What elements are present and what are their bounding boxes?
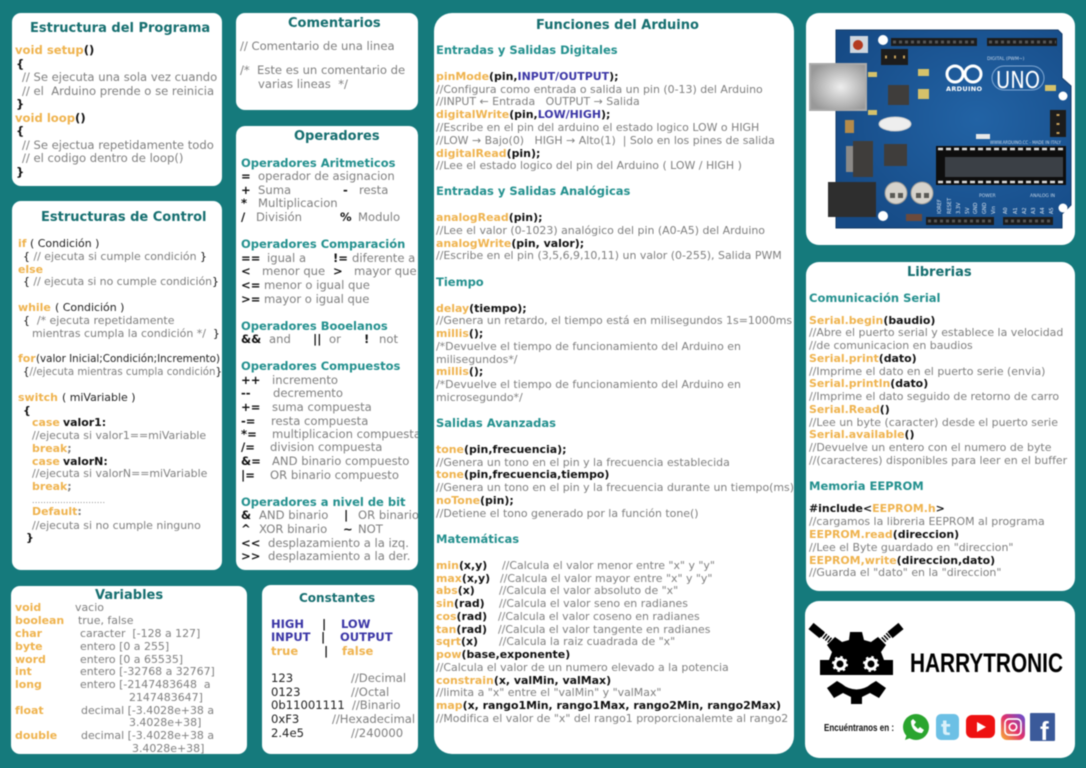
section: Matematicas: //Calcula el valor absoluto de "x" [499,584,678,597]
icon: facebook: f [1040,716,1049,746]
icon: Arduino UNO board: UNO [996,68,1040,94]
section: Tiempo: /*Devuelve el tiempo de funcionamiento del Arduino en [436,378,741,391]
section: Matematicas: min(x,y) [436,559,487,572]
variable type table: word [15,653,46,666]
code: if else: { // ejecuta si cumple condición } [23,250,207,263]
operators: compuestos [241,359,421,483]
section: Entradas y Salidas Analogicas: analogWrite(pin, valor); [436,237,584,250]
operators: nivel de bit: XOR binario [259,522,327,536]
operators: compuestos: -= [241,414,256,428]
operators: aritmeticos: operador de asignacion [258,169,395,183]
section: Matematicas [436,532,788,725]
bottom pin labels [937,197,1055,214]
operators: nivel de bit: & [241,508,251,522]
bottom pin labels: A0 [1003,207,1009,214]
operators: aritmeticos: % [340,210,352,224]
section: Comunicacion Serial: //Imprime el dato seguido de retorno de carro [809,390,1059,403]
section: Entradas y Salidas Analogicas: //Escribe en el pin (3,5,6,9,10,11) un valor (0-255), Salida PWM [436,249,782,262]
operators: comparacion: == [241,251,260,265]
code: setup and loop: // el codigo dentro de loop() [22,151,183,165]
operators: comparacion: >= [241,292,260,306]
code: switch: break; [32,480,72,493]
operators: nivel de bit: NOT [358,522,384,536]
operators: nivel de bit: >> [241,549,260,563]
heading: Funciones del Arduino: Funciones del Arduino [536,18,699,33]
operators: aritmeticos: resta [359,183,388,197]
code: switch: valorN: [63,455,108,468]
code: switch: } [26,531,34,544]
code: switch: case [32,416,60,429]
section: Comunicacion Serial: Comunicación Serial [809,291,940,305]
code: for: for [18,352,36,365]
code: switch: ( miVariable ) [62,391,135,404]
operators: comparacion [241,237,417,306]
operators: comparacion: menor o igual que [264,278,370,292]
logical constants: HIGH [271,617,304,631]
section: Salidas Avanzadas: tone(pin,frecuencia,tiempo) [436,468,609,481]
panel: Arduino UNO board image [806,13,1075,245]
code: switch: Default: [32,505,82,518]
variable type table: decimal [-3.4028e+38 a [81,704,214,717]
logical constants: INPUT [271,630,311,644]
section: Matematicas: //Calcula el valor coseno en radianes [498,610,700,623]
social label: Encuéntranos en : [824,723,894,734]
code: if else [18,237,219,288]
code: switch: .......................... [32,496,105,505]
section: Salidas Avanzadas [436,416,794,520]
number formats: 123 [271,671,293,685]
section: Matematicas: //Modifica el valor de "x" del rango1 proporcionalemte al rango2 [436,712,788,725]
section: Entradas y Salidas Analogicas: analogRead(pin); [436,211,542,224]
variable type table: double [15,729,57,742]
code: if else: if [18,237,27,250]
microcontroller chip [936,146,1066,185]
comment examples: Este es un comentario de [257,63,405,77]
section: Tiempo: /*Devuelve el tiempo de funcionamiento del Arduino en [436,340,741,353]
number formats: //Decimal [351,671,406,685]
logical constants: true [271,644,298,658]
bottom pin labels: IOREF [937,199,943,214]
section: Comunicacion Serial: Serial.print(dato) [809,352,917,365]
operators: aritmeticos: * [241,196,247,210]
operators: aritmeticos [241,156,400,224]
panel: Harrytronic brand [805,601,1075,758]
code: switch: valor1: [63,416,106,429]
number formats: 2.4e5 [271,726,304,740]
number formats: //Binario [352,698,401,712]
comment examples: // Comentario de una linea [240,39,395,53]
icon: Arduino UNO board: DIGITAL (PWM~) [987,56,1025,62]
icon: Arduino UNO board [810,30,1071,228]
section: Matematicas: //Calcula el valor menor entre "x" y "y" [502,559,715,572]
variable type table: void [15,601,41,614]
operators: compuestos: multiplicacion compuesta [272,427,421,441]
code: for [18,352,222,378]
variable type table: int [15,665,32,678]
section: Comunicacion Serial: Serial.begin(baudio) [809,314,935,327]
section: Memoria EEPROM: #include<EEPROM.h> [809,502,945,515]
variable type table: boolean [15,614,64,627]
operators: aritmeticos: Operadores Aritmeticos [241,156,396,170]
heading: Librerias: Librerias [907,265,972,280]
operators: aritmeticos: Multiplicacion [258,196,338,210]
code: setup and loop: // Se ejecuta una sola vez cuando [22,70,217,84]
operators: aritmeticos: División [256,210,302,224]
code: setup and loop: void setup() [15,43,94,57]
section: Matematicas: cos(rad) [436,610,487,623]
icon: Harrytronic gear robot logo [811,626,901,704]
operators: booleanos: and [269,332,291,346]
code: setup and loop: // Se ejectua repetidamente todo [22,138,214,152]
code: setup and loop: void loop() [15,111,86,125]
operators: comparacion: diferente a [352,251,415,265]
icon: whatsapp [903,714,929,740]
bottom pin labels: A3 [1031,207,1037,214]
operators: aritmeticos: + [241,183,251,197]
section: Comunicacion Serial: Serial.available() [809,428,914,441]
reset button [850,36,868,53]
code: setup and loop: } [16,165,24,179]
section: Memoria EEPROM: EEPROM,write(direccion,dato) [809,554,995,567]
variable type table: entero [-2147483648 a [80,678,211,691]
section: Matematicas: max(x,y) [436,572,490,585]
operators: booleanos: ! [364,332,369,346]
operators: aritmeticos: Modulo [358,210,400,224]
panel: Estructuras de Control [12,201,222,570]
code: setup and loop: } [16,97,24,111]
section: Matematicas: map(x, rango1Min, rango1Max, rango2Min, rango2Max) [436,699,781,712]
section: Matematicas: pow(base,exponente) [436,648,570,661]
section: Memoria EEPROM: //Lee el Byte guardado en "direccion" [809,541,1013,554]
section: Matematicas: //Calcula el valor seno en radianes [499,597,688,610]
operators: compuestos: decremento [273,386,343,400]
capacitors [885,182,933,204]
section: Memoria EEPROM [809,479,1045,579]
section: Comunicacion Serial: //Imprime el dato en el puerto serie (envia) [809,365,1045,378]
code: while: ( Condición ) [55,301,124,314]
comment examples: /* [240,63,250,77]
heading: Estructura del Programa: Estructura del Programa [30,21,210,36]
icon: twitter [936,714,959,740]
logical constants: false [342,644,374,658]
section: Matematicas: //Calcula el valor de un numero elevado a la potencia [436,661,729,674]
heading: Comentarios: Comentarios [288,16,381,31]
section: Comunicacion Serial: //de comunicacion en baudios [809,339,973,352]
section: Entradas y Salidas Analogicas [436,184,782,262]
panel: Comentarios [236,13,418,110]
operators: nivel de bit: OR binario [358,508,419,522]
variable type table: 2147483647] [129,691,203,704]
variable type table: true, false [78,614,134,627]
bottom pin labels: A2 [1022,207,1028,214]
section: Comunicacion Serial: //Abre el puerto serial y establece la velocidad [809,326,1063,339]
section: Entradas y Salidas Analogicas: Entradas y Salidas Analógicas [436,184,631,198]
variable type table: vacio [75,601,104,614]
code: while: while [18,301,51,314]
code: for: {//ejecuta mientras cumpla condición} [23,365,222,378]
logical constants: | [321,630,325,644]
code: while [18,301,220,340]
code: setup and loop: // el Arduino prende o se reinicia [22,84,214,98]
section: Comunicacion Serial: Serial.println(dato) [809,377,928,390]
code: switch: //ejecuta si valorN==miVariable [32,467,208,480]
number formats: 0xF3 [271,712,299,726]
code: switch: case [32,455,60,468]
operators: nivel de bit: ~ [343,522,353,536]
section: Tiempo: millis(); [436,327,483,340]
section: Entradas y Salidas Digitales: //Lee el estado logico del pin del Arduino ( LOW / HIGH ) [436,159,742,172]
section: Comunicacion Serial: //Lee un byte (caracter) desde el puerto serie [809,416,1058,429]
section: Entradas y Salidas Digitales: //Configura como entrada o salida un pin (0-13) del Arduino [436,83,763,96]
number formats: 0b11001111 [271,698,345,712]
section: Entradas y Salidas Digitales: //INPUT ← Entrada OUTPUT → Salida [436,95,640,108]
section: Memoria EEPROM: //Guarda el "dato" en la "direccion" [809,566,1001,579]
operators: comparacion: > [333,264,343,278]
code: setup and loop [15,43,217,179]
operators: compuestos: resta compuesta [271,414,368,428]
USB connector [810,64,866,110]
section: Salidas Avanzadas: //Detiene el tono generado por la función tone() [436,507,699,520]
code: while: mientras cumpla la condición */ } [32,327,220,340]
operators: comparacion: mayor o igual que [264,292,369,306]
section: Matematicas: //Calcula la raiz cuadrada de "x" [499,635,675,648]
section: Tiempo: milisegundos*/ [436,353,518,366]
bottom pin labels: 3.3V [956,202,962,214]
icon: instagram [1001,714,1025,740]
operators: booleanos: Operadores Booelanos [241,319,388,333]
comment examples: varias lineas */ [258,77,348,91]
operators: nivel de bit: | [344,508,348,523]
icon: Arduino UNO board: POWER [979,193,996,199]
bottom pin labels: A4 [1040,207,1046,214]
code: switch: { [23,404,31,417]
operators: compuestos: &= [241,454,261,468]
operators: comparacion: mayor que [354,264,417,278]
section: Comunicacion Serial: //Devuelve un entero con el numero de byte [809,441,1052,454]
operators: booleanos: || [313,332,321,347]
bottom pin labels: 5V [965,207,971,214]
section: Comunicacion Serial: //(caracteres) disponibles para leer en el buffer [809,454,1068,467]
operators: compuestos: AND binario compuesto [272,454,409,468]
number formats: //Hexadecimal [332,712,415,726]
section: Matematicas: Matemáticas [436,532,519,546]
operators: nivel de bit: desplazamiento a la izq. [268,536,409,550]
board logo [947,66,981,82]
panel: Variables [11,586,247,755]
panel: Funciones del Arduino [434,13,794,754]
variable type table [15,601,215,755]
operators: compuestos: ++ [241,373,260,387]
code: if else: { // ejecuta si no cumple condición} [23,275,219,288]
bottom pin labels: RESET [947,197,953,214]
section: Matematicas: //limita a "x" entre el "valMin" y "valMax" [436,686,661,699]
operators: nivel de bit: Operadores a nivel de bit [241,495,406,509]
code: switch: //ejecuta si no cumple ninguno [32,519,201,532]
operators: comparacion: < [241,264,251,278]
section: Salidas Avanzadas: Salidas Avanzadas [436,416,556,430]
code: setup and loop: { [16,57,24,71]
operators: compuestos: suma compuesta [272,400,372,414]
section: Salidas Avanzadas: tone(pin,frecuencia); [436,443,567,456]
code: switch [18,391,208,544]
operators: booleanos: or [329,332,341,346]
operators: compuestos: /= [241,440,255,454]
operators: nivel de bit: desplazamiento a la der. [268,549,410,563]
variable type table: byte [15,640,43,653]
number formats [271,671,415,740]
comment examples [240,39,405,91]
number formats: //240000 [351,726,403,740]
code: while: { /* ejecuta repetidamente [23,314,175,327]
section: Salidas Avanzadas: //Genera un tono en el pin y la frecuencia establecida [436,456,730,469]
operators: compuestos: Operadores Compuestos [241,359,400,373]
section: Matematicas: abs(x) [436,584,475,597]
operators: booleanos: && [241,332,261,346]
section: Entradas y Salidas Digitales: digitalRead(pin); [436,147,540,160]
section: Matematicas: sin(rad) [436,597,485,610]
bottom pin labels: GND [973,202,979,214]
section: Entradas y Salidas Digitales [436,43,775,172]
heading: Operadores: Operadores [294,129,380,144]
section: Tiempo: millis(); [436,365,483,378]
icon: Arduino UNO board: ANALOG IN [1030,193,1055,199]
operators: compuestos: += [241,400,260,414]
variable type table: decimal [-3.4028e+38 a [81,729,214,742]
section: Memoria EEPROM: Memoria EEPROM [809,479,924,493]
section: Tiempo: //Genera un retardo, el tiempo está en milisegundos 1s=1000ms [436,314,792,327]
operators: compuestos: OR binario compuesto [270,468,399,482]
operators: aritmeticos: / [241,210,246,224]
bottom pin labels: A1 [1013,207,1019,214]
section: Matematicas: tan(rad) [436,623,487,636]
section: Comunicacion Serial [809,291,1068,467]
operators: aritmeticos: = [241,169,251,183]
heading: Variables: Variables [95,588,163,603]
operators: comparacion: <= [241,278,260,292]
section: Entradas y Salidas Digitales: digitalWrite(pin,LOW/HIGH); [436,108,610,121]
section: Entradas y Salidas Digitales: //LOW → Bajo(0) HIGH → Alto(1) | Solo en los pines de salida [436,134,775,147]
variable type table: 3.4028e+38] [132,742,204,755]
code: for: (valor Inicial;Condición;Incremento) [36,352,220,365]
code: switch: break; [32,442,72,455]
section: Memoria EEPROM: //cargamos la libreria EEPROM al programa [809,515,1045,528]
panel: Librerias [806,262,1075,591]
variable type table: entero [0 a 65535] [80,653,183,666]
operators: comparacion: Operadores Comparación [241,237,405,251]
logical constants: | [322,617,326,631]
variable type table: 3.4028e+38] [129,716,201,729]
bottom pin labels: A5 [1049,207,1055,214]
operators: booleanos: not [379,332,398,346]
operators: aritmeticos: - [343,183,348,197]
code: if else: else [18,263,43,276]
operators: compuestos: division compuesta [270,440,382,454]
section: Salidas Avanzadas: noTone(pin); [436,494,514,507]
code: if else: ( Condición ) [30,237,99,250]
heading: Estructuras de Control: Estructuras de Control [41,210,207,225]
operators: compuestos: -- [241,386,251,400]
operators: compuestos: incremento [272,373,338,387]
panel: Estructura del Programa [12,13,222,186]
section: Tiempo [436,275,792,404]
section: Matematicas: sqrt(x) [436,635,478,648]
operators: comparacion: != [333,251,348,265]
code: switch: switch [18,391,58,404]
section: Entradas y Salidas Analogicas: //Lee el valor (0-1023) analógico del pin (A0-A5) del Arduino [436,224,765,237]
variable type table: entero [-32768 a 32767] [80,665,215,678]
heading: Constantes: Constantes [299,591,375,605]
section: Matematicas: //Calcula el valor mayor entre "x" y "y" [500,572,712,585]
section: Entradas y Salidas Digitales: pinMode(pin,INPUT/OUTPUT); [436,70,618,83]
section: Entradas y Salidas Digitales: Entradas y Salidas Digitales [436,43,618,57]
icon: youtube [966,715,995,738]
logical constants: OUTPUT [340,630,393,644]
icon: facebook [1030,713,1055,746]
variable type table: long [15,678,42,691]
power jack [828,182,876,217]
code: setup and loop: { [16,124,24,138]
section: Memoria EEPROM: EEPROM.read(direccion) [809,528,959,541]
variable type table: float [15,704,44,717]
operators: nivel de bit: << [241,536,260,550]
icon: Arduino UNO board: ARDUINO [946,85,982,93]
section: Tiempo: Tiempo [436,275,484,289]
logical constants: | [324,644,328,658]
section: Matematicas: //Calcula el valor tangente en radianes [498,623,711,636]
variable type table: caracter [-128 a 127] [80,627,200,640]
section: Salidas Avanzadas: //Genera un tono en el pin y la frecuencia durante un tiempo(ms) [436,481,794,494]
operators: compuestos: |= [241,468,255,483]
icon: twitter: t [941,716,951,740]
logical constants [271,617,393,658]
section: Matematicas: constrain(x, valMin, valMax) [436,674,611,687]
bottom pin labels: GND [982,202,988,214]
variable type table: entero [0 a 255] [80,640,169,653]
section: Comunicacion Serial: Serial.Read() [809,403,890,416]
operators: nivel de bit: AND binario [259,508,328,522]
operators: comparacion: menor que [262,264,325,278]
code: switch: //ejecuta si valor1==miVariable [32,429,206,442]
operators: nivel de bit [241,495,419,563]
bottom pin labels: Vin [991,206,997,214]
icon: Arduino UNO board: WWW.ARDUINO.CC - MADE IN ITALY [990,140,1061,145]
number formats: 0123 [271,685,301,699]
section: Tiempo: microsegundo*/ [436,391,523,404]
logical constants: LOW [341,617,371,631]
operators: compuestos: *= [241,427,257,441]
regulators and small ICs [853,85,909,177]
operators: booleanos [241,319,398,347]
section: Entradas y Salidas Digitales: //Escribe en el pin del arduino el estado logico LOW o HIGH [436,121,759,134]
number formats: //Octal [351,685,389,699]
panel: Operadores [236,126,421,570]
variable type table: char [15,627,43,640]
operators: comparacion: igual a [267,251,306,265]
operators: aritmeticos: Suma [258,183,291,197]
operators: nivel de bit: ^ [241,522,251,536]
section: Tiempo: delay(tiempo); [436,302,527,315]
panel: Constantes [262,585,418,754]
